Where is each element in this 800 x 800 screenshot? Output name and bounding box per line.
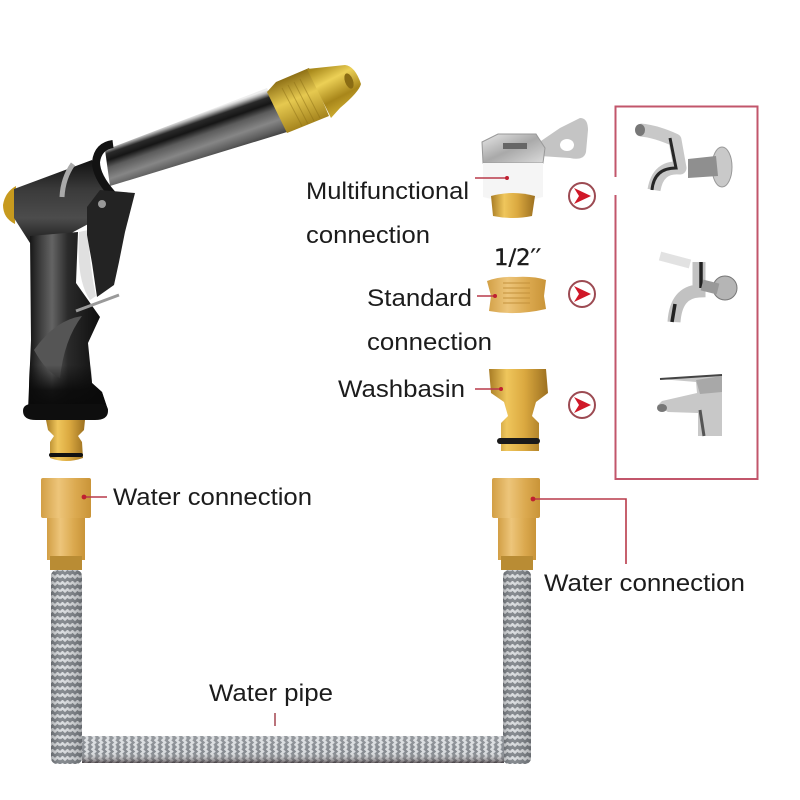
nozzle collar knurling [282,79,320,126]
standard brass connector [487,277,546,313]
pointer line: multifunctional [475,176,509,180]
washbasin brass connector [489,369,548,451]
nozzle opening [343,72,355,90]
clamp band slot [503,143,527,149]
panel: faucet types [616,106,758,479]
arrow badge 3 [569,392,595,418]
icon: basin faucet [657,375,722,436]
gun collar ring [96,144,113,194]
white cylinder [483,163,543,201]
trigger pivot screw [98,200,106,208]
trigger latch [76,295,119,311]
grip lower gloss [29,365,107,407]
metal clamp band [482,134,545,163]
icon: wall faucet two [660,256,737,322]
label: left water connection: Water connection [113,484,312,511]
pointer line: left water connection [82,495,107,499]
connector key [538,118,588,159]
left water connection fitting [41,478,91,570]
pointer line: washbasin [475,387,503,391]
label: one-half inch: 1/2′′ [494,246,541,271]
gun barrel [105,88,287,186]
right water connection fitting [492,478,540,570]
label: multifunctional connection: connection [306,222,430,249]
icon: wall faucet one [635,124,732,190]
label: standard connection: connection [367,329,492,356]
key hole [560,139,574,151]
label: washbasin: Washbasin [338,376,465,403]
label: multifunctional connection [306,178,469,249]
pointer line: standard [477,294,497,298]
gun brass quick connector [46,420,85,461]
arrow badge 2 [569,281,595,307]
pointer line: right water connection [531,497,626,564]
gun nozzle tip [307,65,361,118]
gun back cap [3,186,16,224]
connector o-ring [49,453,83,457]
label: standard connection: Standard [367,285,472,312]
gun base flange [23,404,108,420]
pointer tick: water pipe [274,713,276,726]
arrow badge 1 [569,183,595,209]
water pipe hose [51,570,531,764]
multifunctional connector [482,118,588,218]
gun brass nozzle collar [267,68,329,133]
label: standard connection [367,285,492,356]
gun grip [28,232,108,410]
grip swoosh highlight [34,316,82,378]
spray gun [3,65,361,461]
label: right water connection: Water connection [544,570,745,597]
gun head [14,160,112,243]
trigger silver gap [78,230,96,300]
gun head side clip [62,164,73,197]
knurl marks [503,283,530,303]
brass thread [491,193,535,218]
label: multifunctional connection: Multifunctional [306,178,469,205]
trigger [87,190,135,297]
o-ring [497,438,540,444]
label: water pipe: Water pipe [209,680,333,707]
